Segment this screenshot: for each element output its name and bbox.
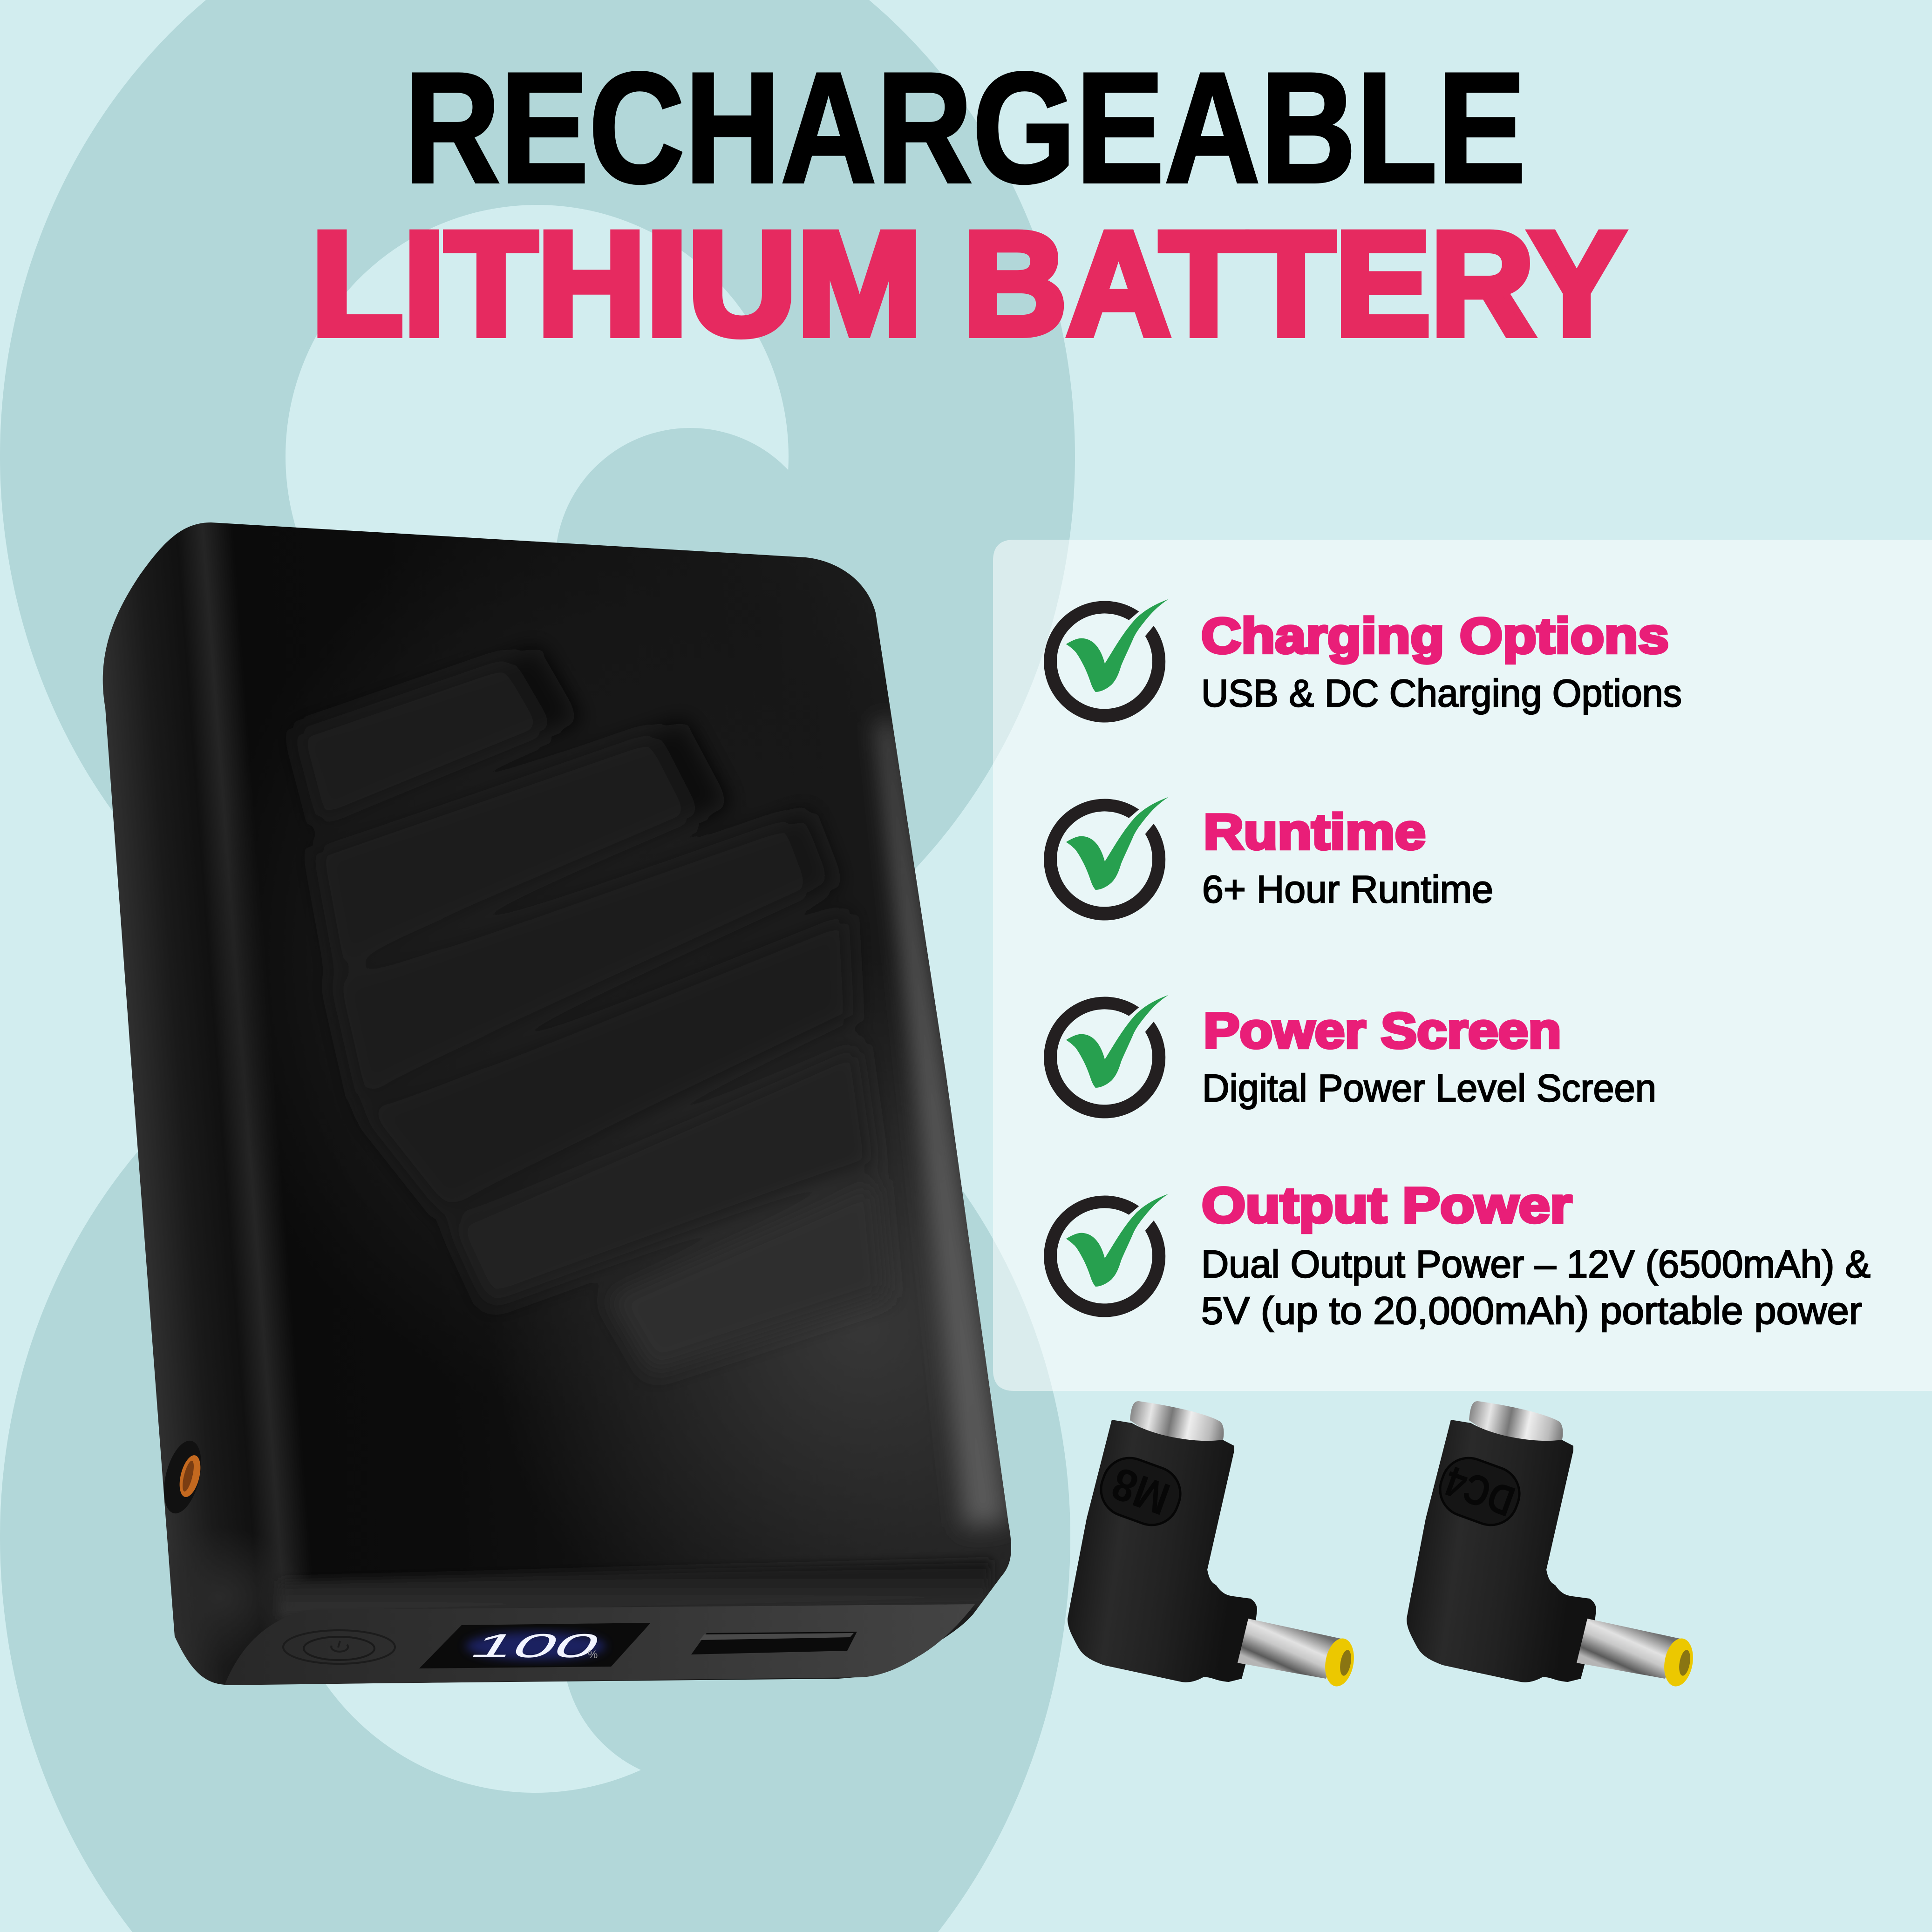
usb port [691, 1632, 857, 1654]
battery pack [103, 489, 1025, 1685]
digital power display: % [588, 1648, 598, 1661]
feature: charging options: USB & DC Charging Options [1201, 671, 1682, 715]
title: RECHARGEABLE [404, 40, 1526, 216]
adapter: DC4 [1407, 1401, 1697, 1688]
feature: power screen [1044, 995, 1656, 1119]
feature: power screen: Digital Power Level Screen [1202, 1066, 1656, 1110]
title: BATTERY [963, 201, 1625, 366]
title [311, 40, 1625, 366]
feature: charging options: Charging Options [1201, 608, 1669, 664]
feature: charging options [1044, 599, 1682, 723]
power button [283, 1630, 395, 1664]
feature: output power: Output Power [1202, 1177, 1572, 1233]
digital power display [419, 1623, 651, 1668]
usb-c port [157, 1437, 208, 1517]
title: LITHIUM [311, 201, 922, 366]
adapter: DC4: DC4 [1439, 1457, 1521, 1525]
background ampersand shape [0, 0, 1075, 1932]
feature: output power [1044, 1177, 1871, 1332]
feature: runtime [1044, 797, 1493, 921]
feature: runtime: Runtime [1204, 804, 1426, 860]
features panel [993, 540, 1932, 1391]
feature: power screen: Power Screen [1204, 1003, 1561, 1058]
feature: runtime: 6+ Hour Runtime [1202, 868, 1493, 911]
feature: output power: Dual Output Power – 12V (6500mAh) & [1201, 1242, 1871, 1286]
digital power display: 100 [462, 1627, 610, 1665]
battery bottom face [224, 1604, 975, 1685]
adapter: M8: M8 [1105, 1457, 1176, 1525]
embossed diagonal ridges [293, 647, 888, 1374]
adapter: M8 [1068, 1401, 1358, 1688]
feature: output power: 5V (up to 20,000mAh) portable power [1201, 1289, 1862, 1332]
